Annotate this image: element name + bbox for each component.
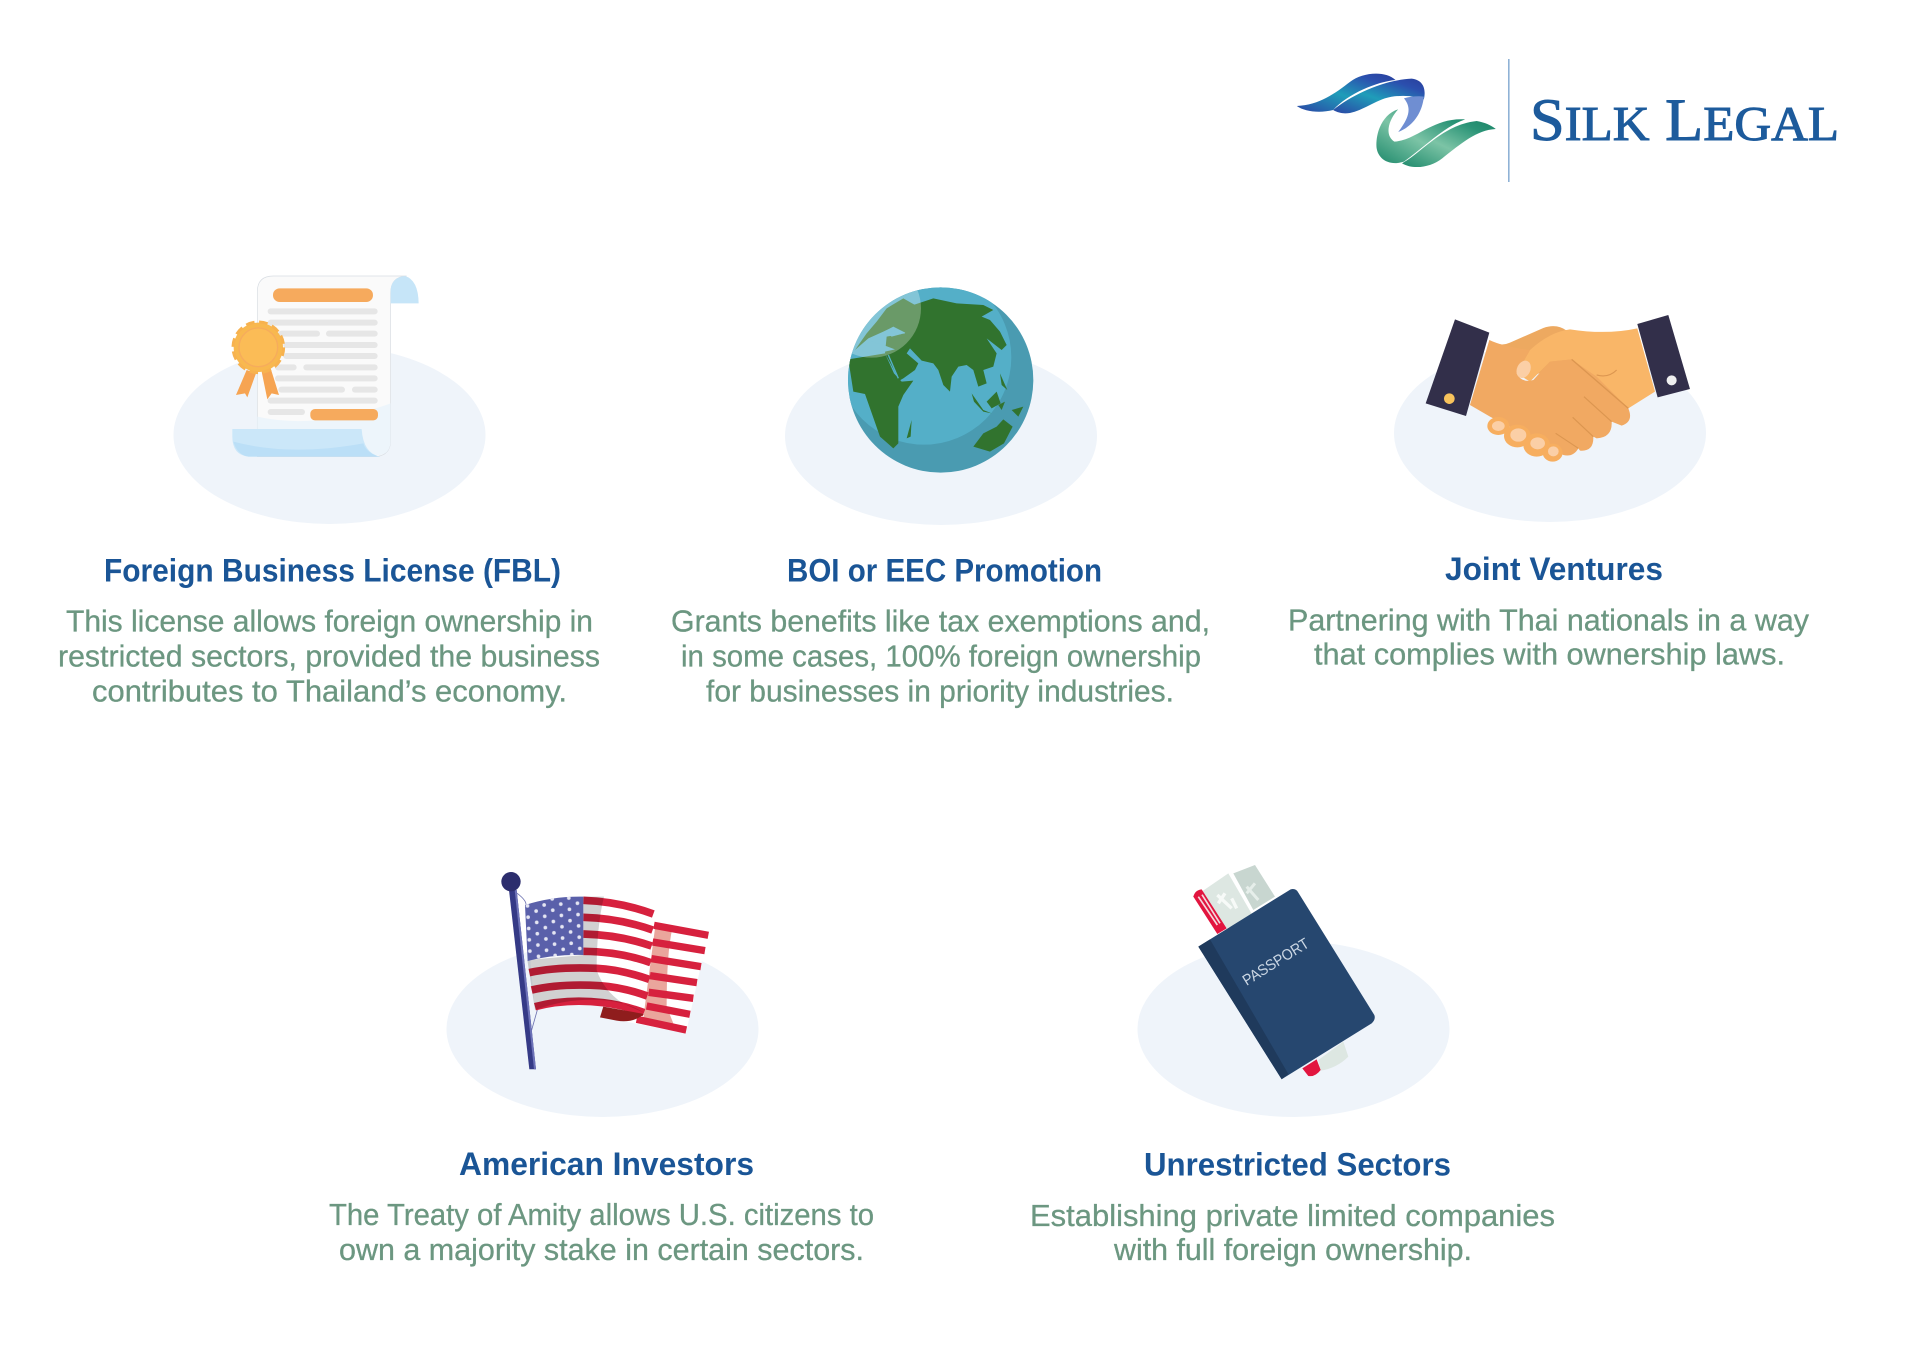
description (329, 1198, 874, 1267)
description: restricted sectors, provided the business (58, 640, 600, 674)
description: with full foreign ownership. (1113, 1233, 1472, 1267)
description: for businesses in priority industries. (706, 674, 1174, 708)
description: The Treaty of Amity allows U.S. citizens to (329, 1198, 874, 1232)
description: contributes to Thailand’s economy. (92, 674, 567, 708)
description (58, 604, 600, 708)
icon: globe on ellipse (785, 287, 1097, 525)
description: Partnering with Thai nationals in a way (1288, 604, 1810, 638)
logo: Silk Legal (1297, 59, 1839, 182)
description: that complies with ownership laws. (1314, 638, 1785, 672)
description: Establishing private limited companies (1030, 1199, 1555, 1233)
logo divider (1508, 59, 1510, 182)
logo mark: silk swoosh (1297, 74, 1496, 167)
description: This license allows foreign ownership in (66, 604, 593, 638)
icon: handshake on ellipse (1394, 315, 1706, 522)
logo wordmark: SILK LEGAL (1530, 87, 1839, 153)
description (1030, 1199, 1555, 1267)
heading: Unrestricted Sectors (1144, 1146, 1451, 1182)
heading: Joint Ventures (1445, 551, 1663, 587)
icon: passport on ellipse: PASSPORT (1240, 935, 1313, 989)
panel: BOI or EEC Promotion (671, 259, 1210, 708)
heading: American Investors (459, 1146, 754, 1182)
icon: certificate on ellipse (174, 276, 486, 524)
panel: Unrestricted Sectors (1030, 865, 1555, 1267)
description (671, 604, 1210, 708)
description (1288, 604, 1810, 672)
panel: Joint Ventures (1288, 315, 1810, 672)
panel: American Investors (329, 872, 874, 1267)
icon: US flag on ellipse (446, 872, 758, 1117)
description: Grants benefits like tax exemptions and, (671, 604, 1210, 638)
panel: Foreign Business License (58, 276, 600, 708)
heading: Foreign Business License (FBL) (104, 552, 561, 588)
heading: BOI or EEC Promotion (787, 552, 1102, 588)
description: in some cases, 100% foreign ownership (681, 640, 1201, 674)
description: own a majority stake in certain sectors. (339, 1233, 864, 1267)
icon: passport on ellipse (1138, 865, 1450, 1117)
